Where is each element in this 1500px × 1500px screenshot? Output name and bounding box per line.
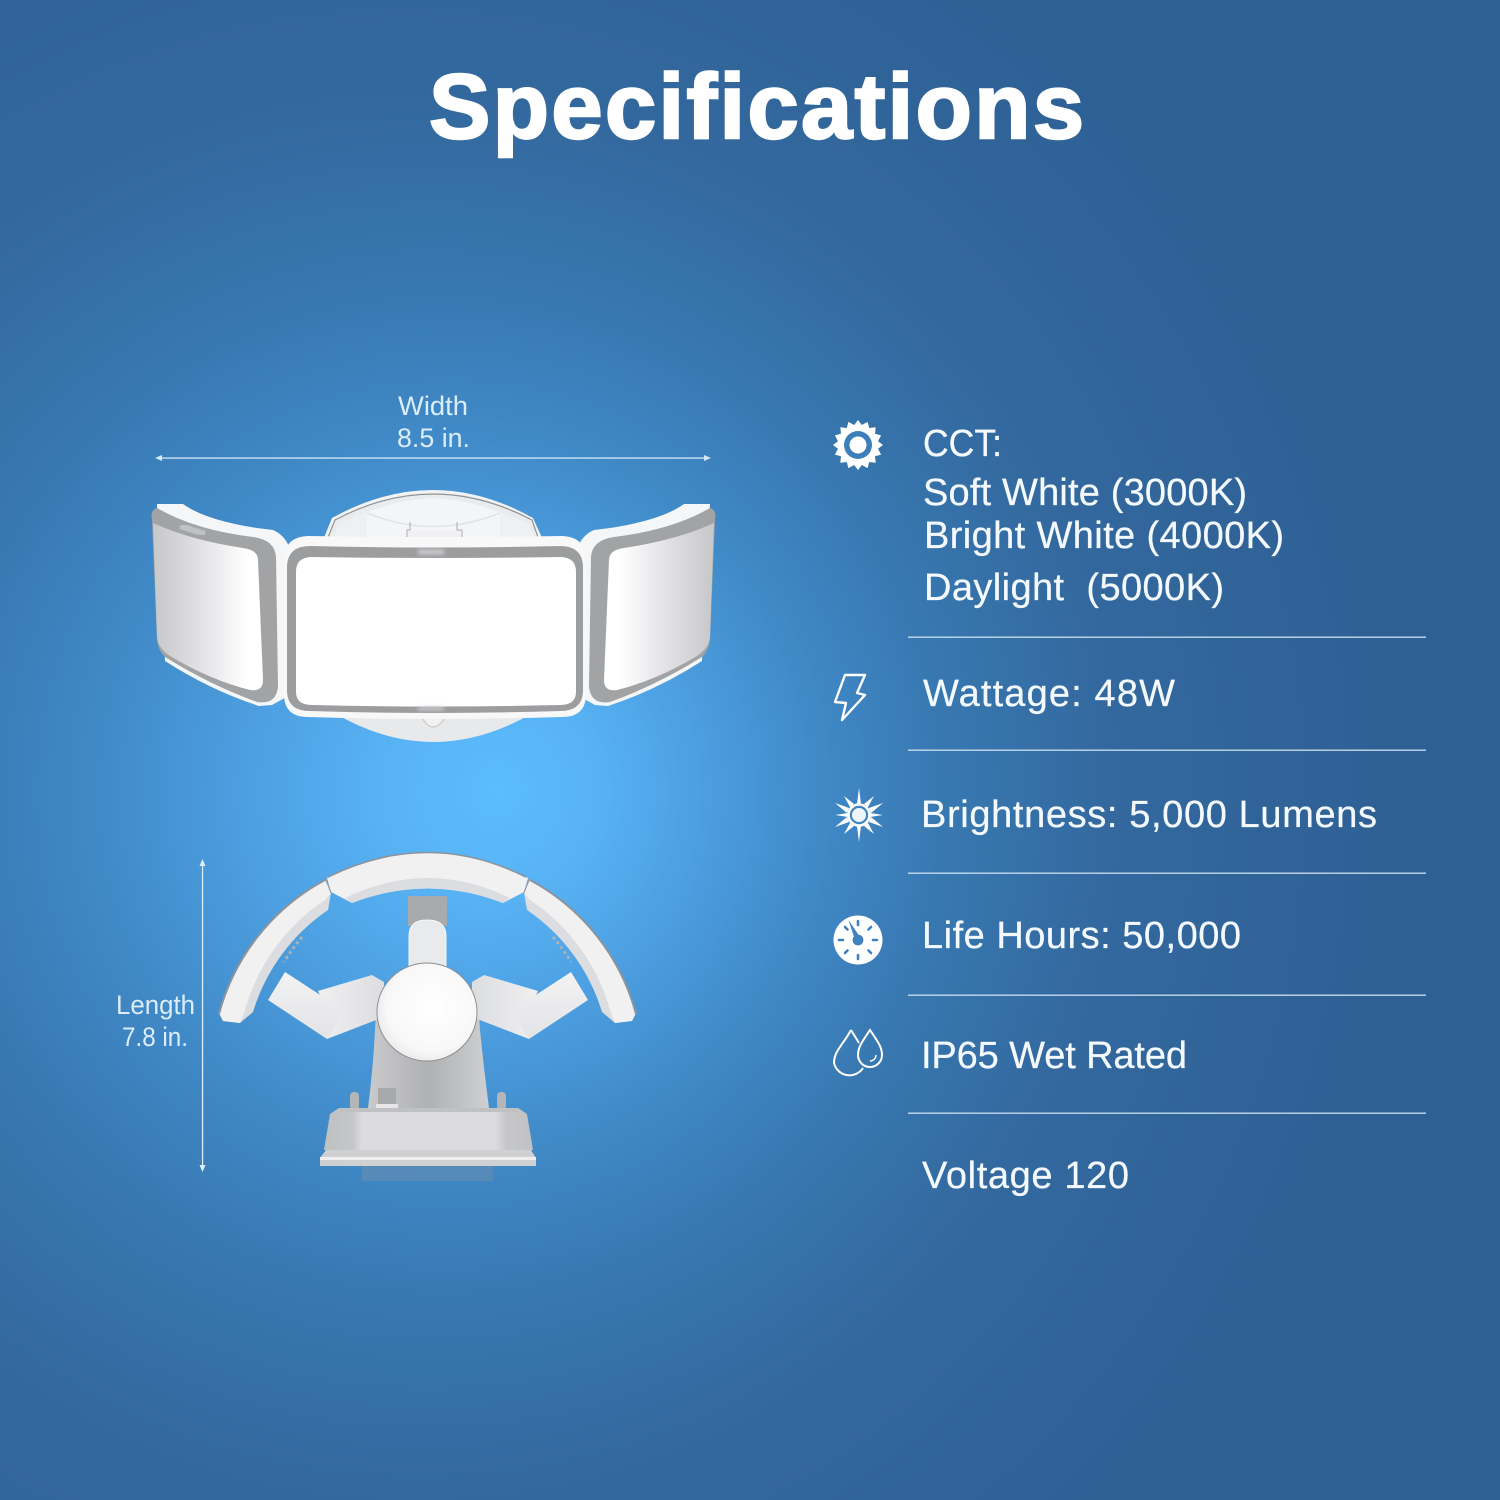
spec row: voltage: Voltage 120: [922, 1155, 1129, 1197]
stem: [408, 896, 447, 926]
icon: clock gauge: [834, 916, 882, 964]
right lamp head: [577, 504, 715, 706]
brightness text: Brightness: 5,000 Lumens: [921, 794, 1377, 836]
icon: gear sun: [833, 420, 883, 470]
icon: water drops: [834, 1030, 882, 1075]
wet rating text: IP65 Wet Rated: [921, 1035, 1187, 1077]
arrow: width: [155, 455, 711, 461]
floodlight side view: [219, 852, 636, 1181]
spec row: wattage: [835, 673, 1175, 720]
wattage text: Wattage: 48W: [923, 673, 1175, 715]
length label: Length: [116, 990, 195, 1020]
left side lamp: [219, 880, 331, 1023]
CCT text: Daylight (5000K): [924, 567, 1224, 609]
spec row: CCT: [833, 420, 1284, 609]
CCT text: Bright White (4000K): [924, 515, 1284, 557]
floodlight front view: [152, 490, 715, 742]
width label: Width: [398, 391, 468, 421]
arrow: length: [200, 859, 206, 1172]
spec row: life hours: [834, 915, 1241, 964]
center side lamp: [326, 852, 529, 903]
lower housing dome: [336, 714, 531, 742]
width dimension: [155, 391, 711, 461]
life hours text: Life Hours: 50,000: [922, 915, 1241, 957]
right side lamp: [524, 880, 636, 1023]
CCT text: Soft White (3000K): [923, 472, 1247, 514]
right arm: [472, 972, 588, 1039]
width label: [397, 391, 470, 453]
left arm: [268, 972, 384, 1039]
mounting bolts: [350, 1088, 506, 1110]
rear housing dome: [323, 490, 543, 540]
CCT text: [923, 423, 1284, 609]
icon: bright sun: [835, 788, 883, 842]
length label: [116, 990, 195, 1052]
center lamp head: [284, 536, 586, 719]
mounting base: [320, 1108, 536, 1166]
CCT text: CCT:: [923, 423, 1002, 465]
mounting base shadow: [362, 1166, 493, 1181]
tongue: [409, 920, 446, 972]
left lamp head: [152, 504, 290, 706]
length dimension: [116, 859, 206, 1172]
hub: [377, 963, 477, 1061]
length label: 7.8 in.: [122, 1022, 188, 1052]
icon: lightning bolt: [835, 675, 865, 720]
stand: [368, 1000, 489, 1108]
spec row: wet rating: [834, 1030, 1187, 1077]
sensor: [421, 716, 446, 727]
spec row: brightness: [835, 788, 1377, 842]
width label: 8.5 in.: [397, 423, 470, 453]
title: Specifications: [429, 56, 1084, 158]
